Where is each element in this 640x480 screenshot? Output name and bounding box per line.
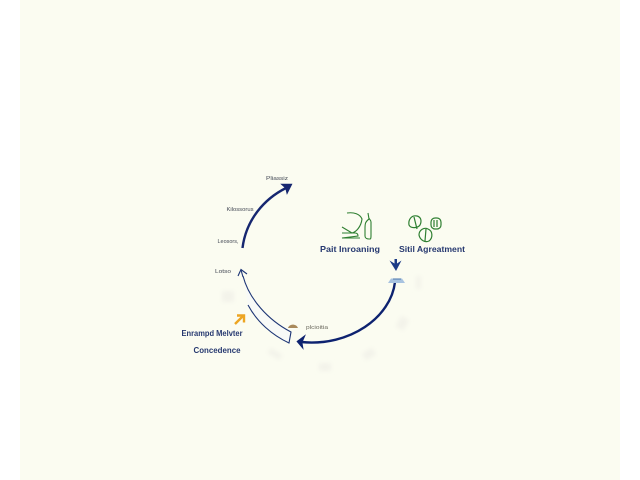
small label: top: Pliassiz [266,176,288,182]
label: Pait Inroaning: Pait Inroaning [320,244,380,254]
icon: orange diagonal arrow [235,316,244,324]
small label: upper: Kilossorus [226,207,254,213]
icon: small brown mound [288,325,298,328]
label: Enrampd Melvter: Enrampd Melvter [182,328,243,338]
small label: middle: Leosors, [218,239,239,245]
small label: lower: Lotso [215,269,231,275]
small label: bottom: plcioitia [306,325,329,331]
label: Sitil Agreatment: Sitil Agreatment [399,244,465,254]
faded ring marks [222,276,421,371]
icon: three leaf clusters [409,216,441,242]
label: Concedence: Concedence [194,345,241,355]
blue node marker [388,278,405,283]
arc arrow: lower right [297,282,395,348]
downward arrow [390,259,402,271]
arc arrow: upper left [242,184,292,248]
outlined band arrow: lower left [238,270,291,343]
icon: bottle and bowl [342,213,371,239]
